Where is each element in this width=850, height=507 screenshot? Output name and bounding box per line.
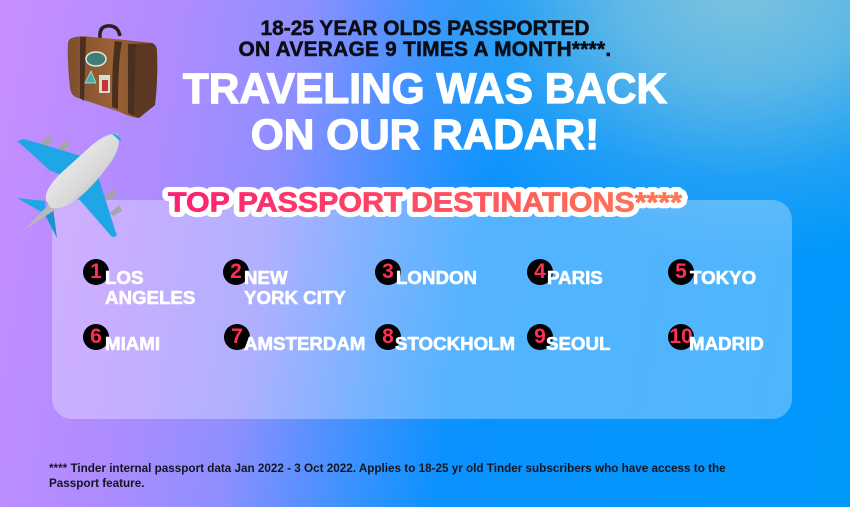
list item 4 bbox=[527, 259, 603, 288]
text: MIAMI bbox=[105, 333, 160, 354]
list item 7 bbox=[224, 324, 365, 354]
title: TRAVELING WAS BACK bbox=[183, 65, 667, 112]
heading: top passport destinations: TOP PASSPORT DESTINATIONS**** bbox=[168, 186, 682, 218]
list item 6 bbox=[83, 324, 160, 354]
title: ON OUR RADAR! bbox=[251, 111, 599, 158]
text: 4 bbox=[534, 260, 546, 283]
text: SEOUL bbox=[546, 333, 610, 354]
footnote: **** Tinder internal passport data Jan 2022 - 3 Oct 2022. Applies to 18-25 yr old Tinder subscribers who have access to the bbox=[49, 462, 726, 475]
subtitle: ON AVERAGE 9 TIMES A MONTH****. bbox=[238, 38, 612, 61]
text: NEW bbox=[244, 267, 288, 288]
text: TOKYO bbox=[690, 267, 756, 288]
list item 9 bbox=[527, 324, 610, 354]
text: 2 bbox=[230, 260, 242, 283]
list item 5 bbox=[668, 259, 756, 288]
list item 10 bbox=[668, 324, 764, 354]
list item 8 bbox=[375, 324, 515, 354]
footnote: Passport feature. bbox=[49, 477, 144, 490]
text: AMSTERDAM bbox=[244, 333, 365, 354]
text: MADRID bbox=[689, 333, 764, 354]
subtitle: 18-25 YEAR OLDS PASSPORTED bbox=[261, 17, 589, 40]
list item 2 bbox=[223, 259, 346, 308]
text: YORK CITY bbox=[244, 287, 346, 308]
text: 5 bbox=[675, 260, 687, 283]
text: 6 bbox=[90, 325, 102, 348]
text: 1 bbox=[90, 260, 102, 283]
text: LONDON bbox=[396, 267, 477, 288]
heading: top passport destinations: TOP PASSPORT DESTINATIONS**** bbox=[168, 186, 682, 218]
text: 3 bbox=[382, 260, 394, 283]
subtitle bbox=[238, 17, 612, 61]
icon: airplane bbox=[17, 134, 122, 238]
list item 3 bbox=[375, 259, 477, 288]
text: 8 bbox=[382, 325, 394, 348]
text: 9 bbox=[534, 325, 546, 348]
list item 1 bbox=[83, 259, 195, 308]
text: PARIS bbox=[547, 267, 603, 288]
icon: suitcase bbox=[68, 24, 158, 118]
text: ANGELES bbox=[105, 287, 195, 308]
footnote bbox=[49, 462, 726, 490]
text: 7 bbox=[231, 325, 243, 348]
panel: destinations bbox=[52, 200, 792, 419]
title bbox=[182, 65, 668, 158]
text: LOS bbox=[105, 267, 143, 288]
text: 10 bbox=[669, 325, 693, 348]
text: STOCKHOLM bbox=[395, 333, 515, 354]
